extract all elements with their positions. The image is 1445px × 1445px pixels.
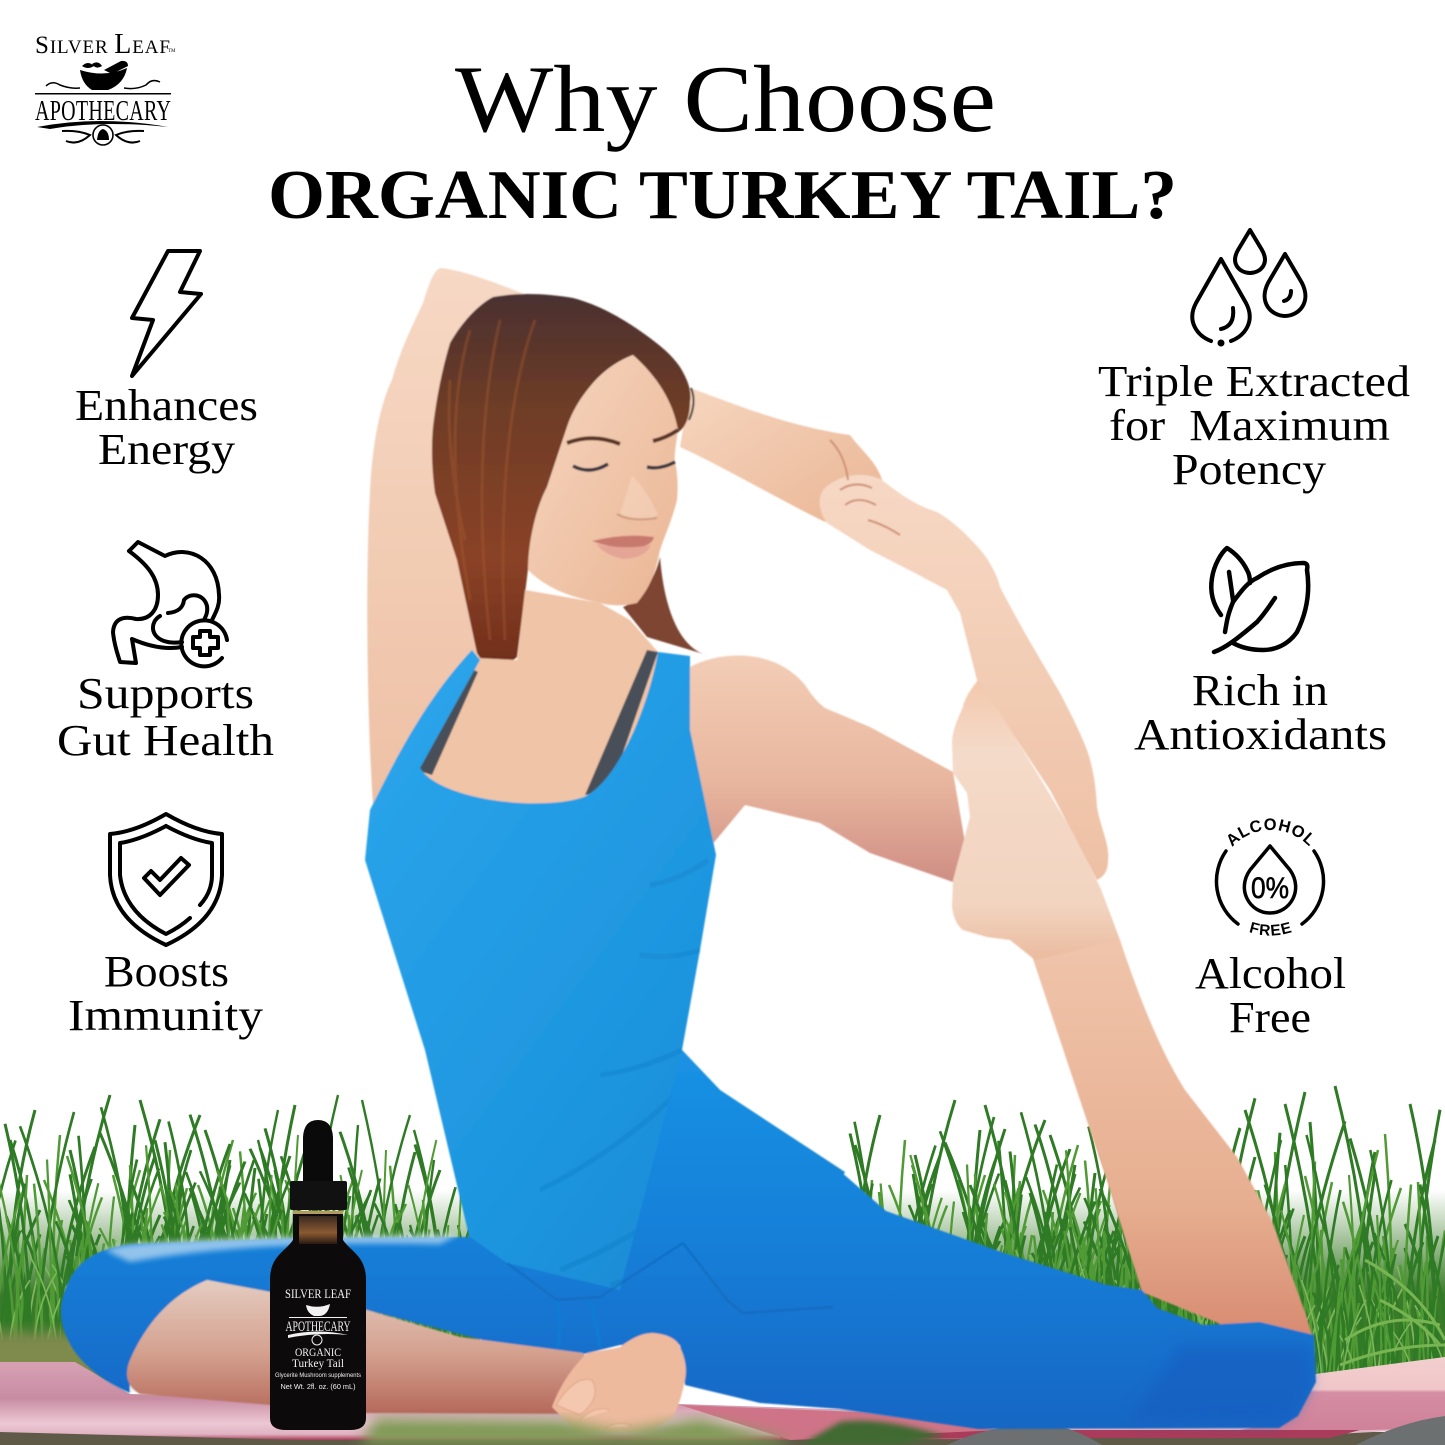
woman in yoga pose (61, 268, 1316, 1432)
label (1098, 357, 1410, 494)
hair strands (449, 320, 535, 640)
title (268, 46, 1177, 234)
bracelet (689, 388, 694, 420)
bottle label text: Glycerite Mushroom supplements (275, 1372, 362, 1379)
label: Supports (77, 669, 254, 718)
label: for Maximum (1109, 401, 1390, 450)
label (75, 381, 258, 474)
leg (1030, 887, 1312, 1340)
bottle label text: APOTHECARY (286, 1319, 351, 1335)
finger lines (830, 440, 900, 535)
bottle label text: SILVER LEAF (285, 1286, 351, 1301)
title: ORGANIC TURKEY TAIL? (268, 157, 1177, 234)
feature: enhances energy (75, 251, 258, 474)
feature: boosts immunity (68, 814, 263, 1040)
logo: Silver Leaf Apothecary: TM (168, 49, 176, 54)
product bottle (270, 1120, 366, 1430)
label (1134, 666, 1387, 759)
label: Energy (98, 425, 235, 474)
foot (952, 680, 1120, 960)
calf (127, 1280, 620, 1414)
icon: alcohol free badge (1214, 818, 1326, 936)
bottle label text (275, 1286, 362, 1391)
pants highlight (105, 1234, 460, 1262)
bottle body (270, 1212, 366, 1430)
eyebrows (567, 430, 678, 444)
lips (592, 536, 654, 548)
feature: triple extracted (1098, 230, 1410, 494)
bottle label text: Turkey Tail (292, 1358, 344, 1370)
dropper bulb (303, 1120, 333, 1182)
icon: alcohol free badge: ALCOHOL (1228, 818, 1312, 847)
hair behind neck (623, 557, 707, 655)
label: Immunity (68, 991, 263, 1040)
label: Gut Health (57, 716, 274, 765)
foot on mat (552, 1333, 686, 1432)
nose shading (620, 475, 658, 520)
pants knee shading (1130, 1345, 1312, 1424)
label: Enhances (75, 381, 258, 430)
icon: shield with check (110, 814, 222, 945)
label: Rich in (1192, 666, 1328, 715)
bottle label text: ORGANIC (295, 1347, 341, 1359)
logo: Silver Leaf Apothecary: APOTHECARY (35, 96, 171, 127)
toes (556, 1379, 632, 1428)
label (1195, 949, 1346, 1042)
foreground blurred grass (360, 1418, 790, 1445)
hair (432, 294, 691, 673)
feature: alcohol free (1195, 818, 1346, 1042)
ground and yoga mat (0, 1332, 1445, 1445)
label: Potency (1172, 445, 1326, 494)
near arm (688, 655, 968, 882)
icon: lightning bolt (132, 251, 201, 376)
forearm and near hand (820, 475, 1108, 880)
feature: rich in antioxidants (1134, 548, 1387, 759)
icon: alcohol free badge: FREE (1250, 922, 1292, 936)
label: Antioxidants (1134, 710, 1387, 759)
label: Alcohol (1195, 949, 1346, 998)
bottle label text: Net Wt. 2fl. oz. (60 mL) (280, 1382, 356, 1391)
neck and chest (400, 590, 665, 830)
logo: Silver Leaf Apothecary (35, 29, 176, 145)
grass: full-width band behind the figure (0, 1086, 1445, 1380)
far hand and wrist (680, 388, 884, 522)
icon: stomach with plus (113, 542, 227, 666)
tank folds (540, 860, 800, 1285)
pants (61, 1050, 1316, 1429)
icon: alcohol free badge: 0% (1251, 872, 1289, 905)
label: Boosts (104, 947, 229, 996)
pocket and folds (507, 1243, 833, 1313)
waist cords (557, 1300, 600, 1347)
icon: leaves (1211, 548, 1308, 652)
raised arm (367, 268, 530, 810)
label: Free (1229, 993, 1311, 1042)
icon: three drops (1192, 230, 1305, 344)
tank top (365, 650, 845, 1300)
cap (290, 1181, 347, 1210)
label: Triple Extracted (1098, 357, 1410, 406)
dark sports bra straps (416, 650, 658, 795)
eyes (573, 462, 675, 470)
face (528, 355, 678, 605)
mortar and pestle (80, 68, 127, 90)
feature: supports gut health (57, 542, 274, 765)
title: Why Choose (455, 46, 996, 152)
logo: Silver Leaf Apothecary: SILVER LEAF (35, 29, 170, 60)
label (57, 669, 274, 765)
label (68, 947, 263, 1040)
